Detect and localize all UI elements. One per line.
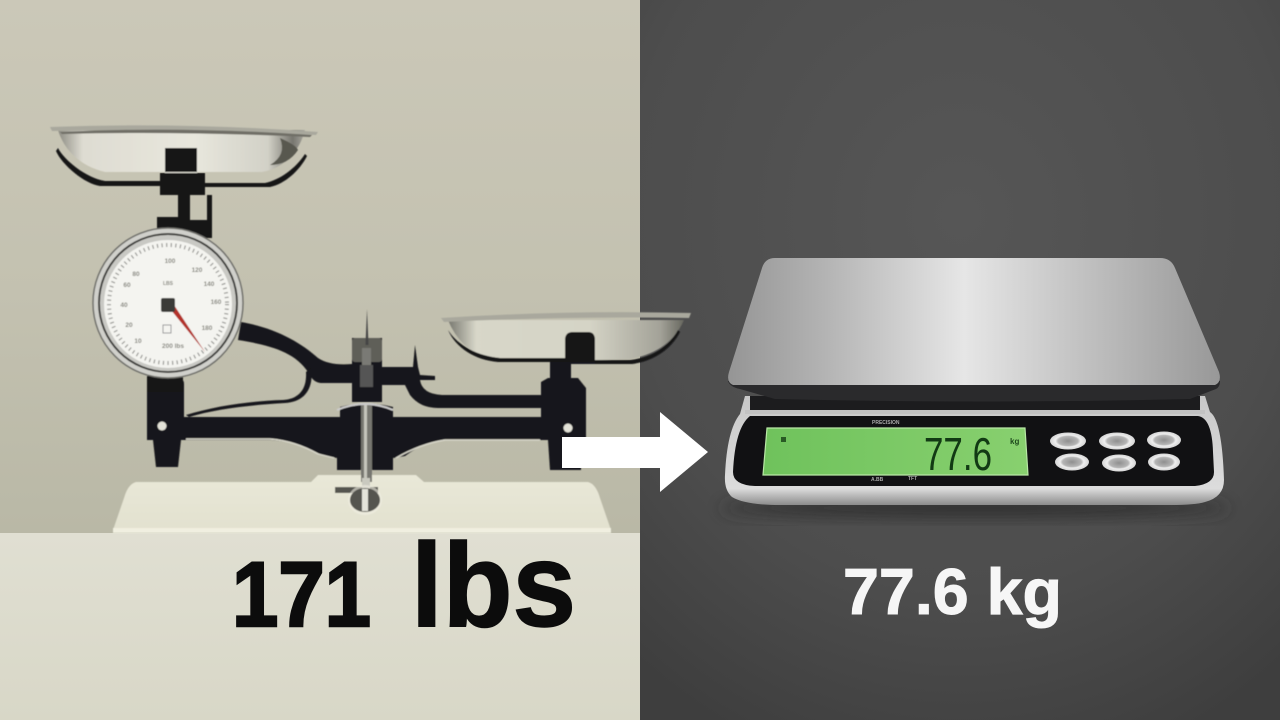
dial numbers: 80 [132, 271, 140, 278]
dial numbers: 120 [192, 267, 203, 274]
LCD display: kg [1010, 437, 1019, 446]
dial numbers: LBS [163, 281, 174, 287]
adjusting knob [348, 478, 382, 515]
weighing platter [728, 258, 1220, 402]
label: imperial weight: 171 [232, 544, 371, 646]
label: metric weight: 77.6 kg [843, 555, 1062, 628]
dial numbers: 100 [165, 258, 176, 265]
icon: analog balance scale [50, 125, 691, 533]
dial gauge [93, 228, 243, 378]
scale small labels: PRECISION [872, 420, 900, 426]
center pivot rod [337, 309, 393, 482]
LCD display [763, 428, 1028, 480]
beam highlights [186, 439, 540, 458]
scale shadow [720, 499, 1230, 517]
dial numbers: 160 [211, 299, 222, 306]
dial numbers: 40 [120, 302, 128, 309]
scale body [725, 396, 1224, 505]
scale small labels: A.BB [871, 477, 884, 483]
beam [147, 322, 595, 470]
control buttons [1050, 432, 1181, 472]
icon: digital kitchen scale [720, 258, 1230, 517]
label: imperial weight [232, 519, 576, 652]
right pan [441, 312, 691, 364]
dial numbers: 60 [123, 282, 131, 289]
panel: left imperial background [0, 0, 640, 720]
arrow [562, 412, 708, 492]
pivot pins [158, 422, 572, 432]
dial numbers: 10 [134, 338, 142, 345]
scale base [113, 475, 611, 533]
dial numbers: 200 lbs [162, 343, 184, 350]
label: imperial weight: lbs [411, 519, 576, 652]
LCD reading: 77.6 [924, 428, 992, 480]
scale small labels [871, 420, 917, 483]
dial numbers: 140 [204, 281, 215, 288]
panel: right metric background [640, 0, 1280, 720]
dial numbers: 20 [125, 322, 133, 329]
dial needle [167, 302, 205, 352]
left pan support [147, 148, 212, 392]
dial numbers: 180 [202, 325, 213, 332]
dial hub [161, 298, 175, 312]
dial numbers [120, 258, 222, 350]
left pan [50, 125, 318, 187]
scale small labels: TFT [908, 476, 917, 482]
